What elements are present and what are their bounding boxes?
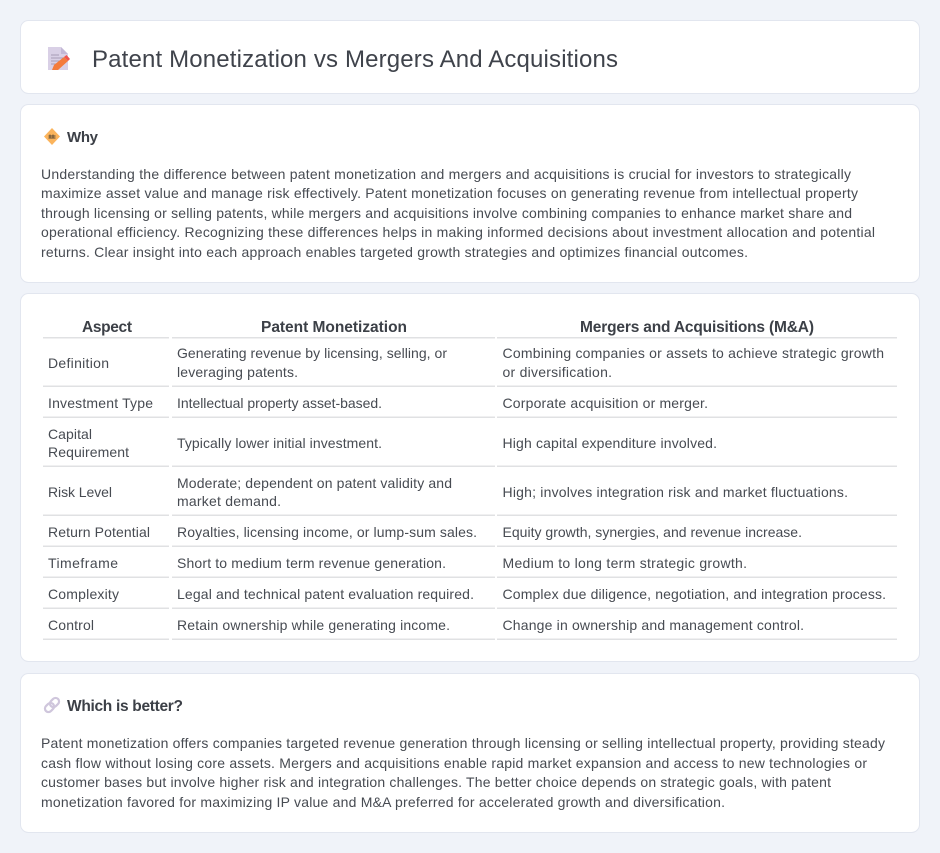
row: definition <box>48 345 884 380</box>
row: definition: Definition <box>48 355 109 371</box>
row: complexity <box>48 586 886 602</box>
panel: comparison table <box>20 294 920 662</box>
row: risk level <box>48 475 848 509</box>
panel: title header <box>20 20 920 94</box>
row: control: Change in ownership and management control. <box>502 617 804 633</box>
heading: why: Why <box>67 129 99 146</box>
row: investment type: Investment Type <box>48 395 153 411</box>
title: Patent Monetization vs Mergers And Acquisitions <box>92 46 618 73</box>
row: timeframe: Timeframe <box>48 555 118 571</box>
row: control <box>48 617 804 633</box>
row: capital requirement: High capital expenditure involved. <box>502 435 717 451</box>
icon: chain link <box>43 696 61 714</box>
row: investment type: Intellectual property asset-based. <box>177 395 382 411</box>
text block: which is better paragraph: Patent monetization offers companies targeted revenue generation through licensing or selling intellectual property, providing steady <box>41 735 885 751</box>
row: definition: Combining companies or assets to achieve strategic growth <box>502 345 884 361</box>
table header: Aspect <box>82 319 132 336</box>
text block: why paragraph: operational efficiency. Recognizing these differences helps in making informed decisions about investment allocation and potential <box>41 224 875 240</box>
table header: Patent Monetization <box>261 319 407 336</box>
row: return potential: Return Potential <box>48 524 150 540</box>
text block: why paragraph <box>41 166 875 260</box>
row: risk level: market demand. <box>177 493 281 509</box>
row: complexity: Legal and technical patent evaluation required. <box>177 586 474 602</box>
row: return potential <box>48 524 802 540</box>
text block: why paragraph: returns. Clear insight into each approach enables targeted growth strategies and optimizes financial outcomes. <box>41 244 748 260</box>
row: definition: Generating revenue by licensing, selling, or <box>177 345 447 361</box>
table header: Mergers and Acquisitions (M&A) <box>580 319 814 336</box>
row: capital requirement: Requirement <box>48 444 129 460</box>
text block: why paragraph: maximize asset value and manage risk effectively. Patent monetization focuses on generating revenue from intellectual property <box>41 185 858 201</box>
row: complexity: Complexity <box>48 586 119 602</box>
text block: which is better paragraph: monetization favored for maximizing IP value and M&A preferred for accelerated growth and diversification. <box>41 794 725 810</box>
icon: document with pencil <box>48 47 70 70</box>
panel: why <box>20 104 920 282</box>
row: risk level: Moderate; dependent on patent validity and <box>177 475 452 491</box>
row: risk level: Risk Level <box>48 484 112 500</box>
row: capital requirement <box>48 426 717 460</box>
heading: which is better: Which is better? <box>67 698 183 715</box>
row: capital requirement: Typically lower initial investment. <box>177 435 382 451</box>
icon: orange diamond <box>44 128 60 145</box>
row: complexity: Complex due diligence, negotiation, and integration process. <box>502 586 886 602</box>
panel: which is better <box>20 674 920 832</box>
row: investment type: Corporate acquisition or merger. <box>502 395 708 411</box>
row: timeframe: Medium to long term strategic growth. <box>502 555 747 571</box>
table header <box>82 319 814 336</box>
row: risk level: High; involves integration risk and market fluctuations. <box>502 484 848 500</box>
row: definition: or diversification. <box>502 364 612 380</box>
row: timeframe <box>48 555 747 571</box>
row: investment type <box>48 395 708 411</box>
text block: which is better paragraph: customer bases but involve higher risk and integration challenges. The better choice depends on strategic goals, with patent <box>41 774 831 790</box>
text block: which is better paragraph: cash flow without losing core assets. Mergers and acquisitions enable rapid market expansion and access to new technologies or <box>41 755 867 771</box>
row: capital requirement: Capital <box>48 426 92 442</box>
row: control: Retain ownership while generating income. <box>177 617 450 633</box>
row: timeframe: Short to medium term revenue generation. <box>177 555 446 571</box>
text block: which is better paragraph <box>41 735 885 810</box>
row: return potential: Royalties, licensing income, or lump-sum sales. <box>177 524 477 540</box>
text block: why paragraph: through licensing or selling patents, while mergers and acquisitions involve combining companies to enhance market share and <box>41 205 852 221</box>
row: control: Control <box>48 617 94 633</box>
row: return potential: Equity growth, synergies, and revenue increase. <box>502 524 802 540</box>
row: definition: leveraging patents. <box>177 364 298 380</box>
text block: why paragraph: Understanding the difference between patent monetization and mergers and acquisitions is crucial for investors to strategically <box>41 166 851 182</box>
